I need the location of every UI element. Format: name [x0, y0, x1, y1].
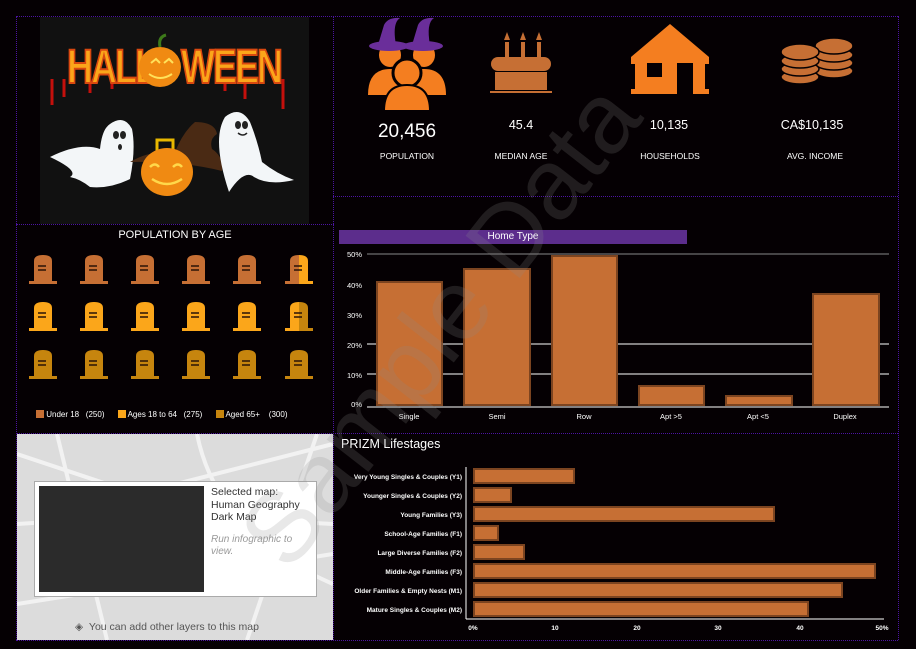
chart: home type bars: 30% [347, 311, 362, 320]
heading: home type [339, 230, 687, 244]
map thumbnail [39, 486, 204, 592]
chart: home type bars: Apt >5 [660, 412, 682, 421]
heading: PRIZM lifestages: PRIZM Lifestages [341, 437, 440, 451]
map note: ◈ You can add other layers to this map [75, 621, 259, 633]
panel: map [17, 434, 333, 640]
chart: home type bars: 40% [347, 281, 362, 290]
map text: Run infographic to view. [211, 534, 292, 557]
chart: home type bars: 0% [351, 400, 362, 409]
chart: PRIZM bars: Middle-Age Families (F3) [385, 569, 462, 576]
watermark: Sample Data: Sample Data [218, 63, 662, 587]
icon: population [368, 18, 446, 110]
map card [34, 481, 317, 597]
icon: ghost left [50, 120, 134, 187]
chart: home type bars: 20% [347, 341, 362, 350]
icon: cake [490, 32, 552, 93]
chart: tombstones [29, 255, 313, 379]
stat: median age: 45.4 [509, 118, 533, 132]
chart: home type bars: Semi [488, 412, 506, 421]
stat: income: CA$10,135 [781, 118, 843, 132]
chart: PRIZM bars: Young Families (Y3) [400, 512, 462, 519]
title: HALLOWEEN: HALLOWEEN [67, 40, 281, 94]
chart: PRIZM bars: Large Diverse Families (F2) [377, 550, 462, 557]
stat: population: 20,456 [378, 121, 436, 142]
chart: PRIZM bars: 30 [714, 625, 722, 632]
icon: house [631, 24, 709, 94]
text: AVG. INCOME [787, 151, 843, 161]
chart: PRIZM bars [354, 467, 889, 632]
chart: PRIZM bars: 50% [875, 625, 889, 632]
text: HOUSEHOLDS [640, 151, 700, 161]
chart: home type bars: 10% [347, 371, 362, 380]
chart: PRIZM bars: 10 [551, 625, 559, 632]
heading: home type: Home Type [488, 231, 538, 242]
panel: halloween image [40, 17, 309, 224]
chart: home type bars: Single [399, 412, 419, 421]
map text: Dark Map [211, 511, 257, 523]
heading: population by age: POPULATION BY AGE [118, 229, 232, 241]
chart: home type bars: 50% [347, 250, 362, 259]
stat: households: 10,135 [650, 118, 688, 132]
chart: PRIZM bars: School-Age Families (F1) [384, 531, 462, 538]
chart: PRIZM bars: Very Young Singles & Couples (Y1) [354, 474, 462, 481]
chart: home type bars: Duplex [833, 412, 857, 421]
title: HALLOWEEN [52, 35, 283, 109]
map text: Human Geography [211, 498, 300, 510]
map text: Selected map: [211, 486, 278, 498]
chart: home type bars: Row [576, 412, 592, 421]
chart: home type bars [347, 250, 889, 421]
chart: PRIZM bars: 0% [468, 625, 478, 632]
icon: ghost right [219, 112, 294, 192]
chart: PRIZM bars: Older Families & Empty Nests (M1) [354, 588, 462, 595]
map text [211, 486, 300, 557]
chart: PRIZM bars: Mature Singles & Couples (M2) [367, 607, 462, 614]
chart: PRIZM bars: 40 [796, 625, 804, 632]
icon: coins [782, 38, 852, 84]
icon: pumpkin with hat [130, 122, 222, 196]
chart: PRIZM bars: 20 [633, 625, 641, 632]
text: POPULATION [380, 151, 434, 161]
chart: PRIZM bars: Younger Singles & Couples (Y2) [363, 493, 462, 500]
chart: home type bars: Apt <5 [747, 412, 769, 421]
text: MEDIAN AGE [495, 151, 547, 161]
legend: age: Under 18 (250) Ages 18 to 64 (275) Aged 65+ (300) [46, 410, 287, 419]
